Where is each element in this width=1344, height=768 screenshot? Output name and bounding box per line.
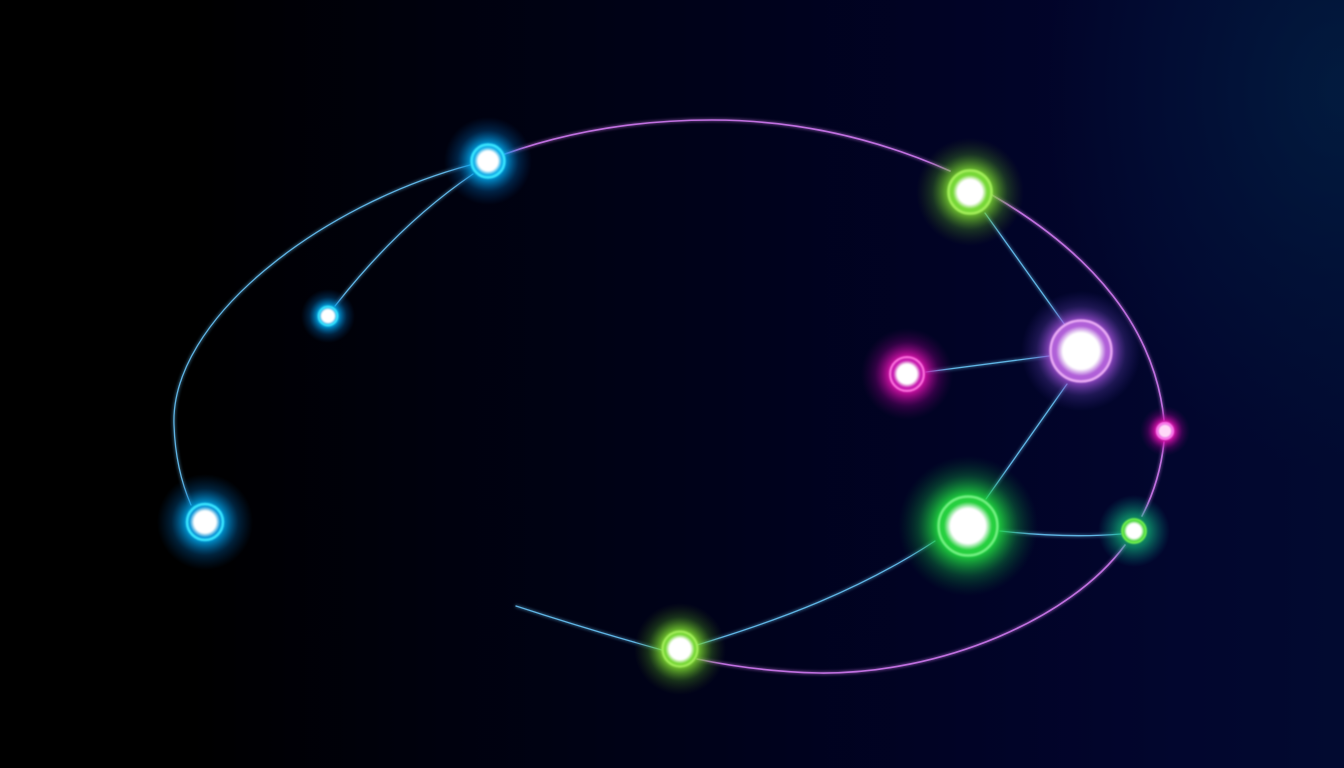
node: magenta <box>861 328 953 420</box>
purple orbit arcs <box>505 120 1164 673</box>
node: large green <box>898 456 1038 596</box>
node: small green <box>1098 495 1170 567</box>
node: cyan top <box>444 117 532 205</box>
node: lime top right <box>916 138 1024 246</box>
node: cyan lower left <box>157 474 253 570</box>
node: small magenta <box>1140 406 1190 456</box>
node: small cyan <box>301 289 355 343</box>
node: large purple <box>1021 291 1141 411</box>
blue connector lines <box>174 165 1121 650</box>
node: lime bottom <box>634 603 726 695</box>
